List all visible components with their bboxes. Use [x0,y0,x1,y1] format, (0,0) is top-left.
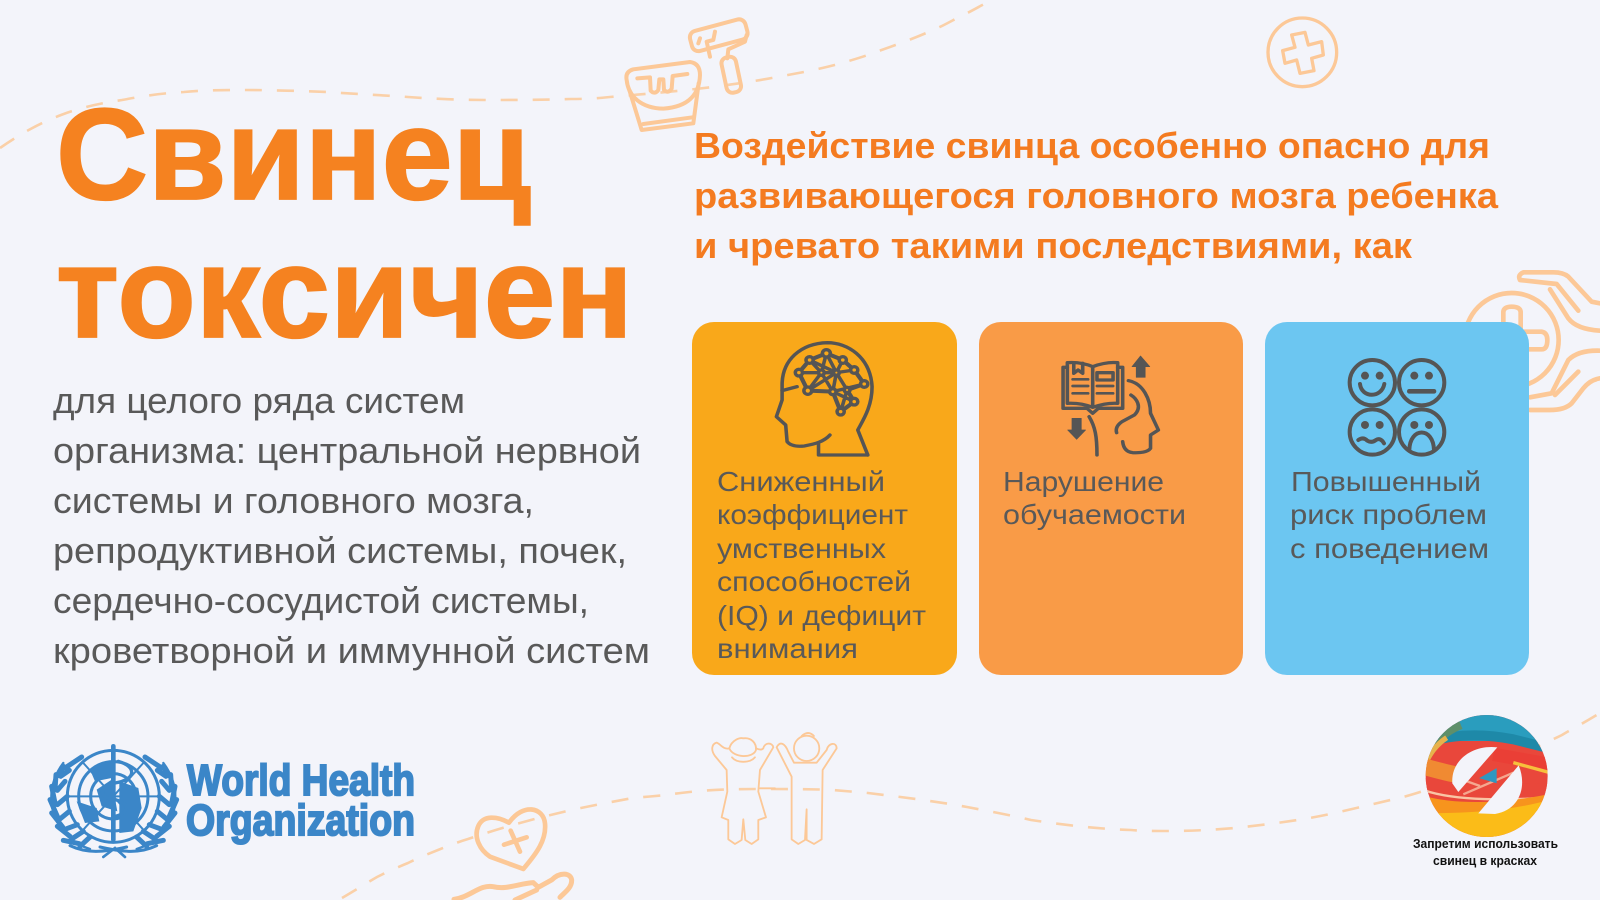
text block: affected body systems: системы и головного мозга, [53,480,534,521]
card text [1003,466,1186,530]
text block: affected body systems: сердечно-сосудистой системы, [53,580,589,621]
logo: paint ring [1426,715,1548,837]
heading: danger to the developing brain [694,125,1499,266]
card text: внимания [717,633,858,664]
card text: способностей [717,566,911,597]
icon: hands holding medical cross [1465,272,1600,410]
title: токсичен [56,219,633,365]
icon: open hand under heart [454,874,572,900]
text block: affected body systems: кроветворной и иммунной систем [53,630,650,671]
card text: умственных [717,533,886,564]
card text: риск проблем [1290,499,1487,530]
panel: behavioural problems [1265,322,1529,675]
card text: Нарушение [1003,466,1164,497]
caption: let's ban lead in paint: свинец в красках [1433,854,1537,868]
icon: book, head and arrows [1063,356,1158,455]
text block: affected body systems: для целого ряда систем [53,380,465,421]
panel: learning impairment [979,322,1243,675]
card text: с поведением [1290,533,1489,564]
wordmark: World Health [187,756,415,805]
caption: let's ban lead in paint: Запретим использовать [1413,837,1558,851]
card text: обучаемости [1003,499,1186,530]
icon: medical cross in circle [1268,18,1337,87]
logo: World Health Organization [50,746,415,857]
card text [717,466,926,664]
card text: Повышенный [1291,466,1481,497]
heading: danger to the developing brain: и чревато такими последствиями, как [694,225,1413,266]
panel: reduced IQ [692,322,957,675]
icon: two children with raised arms [712,733,837,844]
heading: danger to the developing brain: Воздействие свинца особенно опасно для [694,125,1490,166]
heading: danger to the developing brain: развивающегося головного мозга ребенка [694,175,1499,216]
card text [1290,466,1489,564]
title: Свинец [56,81,531,227]
card text: Сниженный [717,466,885,497]
card text: коэффициент [717,499,908,530]
text block: affected body systems: репродуктивной системы, почек, [53,530,627,571]
caption: let's ban lead in paint [1413,837,1558,868]
title [56,81,633,365]
icon: paint bucket and roller [626,18,749,130]
icon: head with brain network [776,343,872,455]
wordmark: Organization [186,796,415,845]
icon: heart with cross [477,809,545,869]
icon: WHO emblem [50,746,177,857]
text block: affected body systems [53,380,650,671]
wordmark [186,756,415,845]
icon: four emotion faces [1350,360,1444,455]
card text: (IQ) и дефицит [717,600,926,631]
text block: affected body systems: организма: центральной нервной [53,430,641,471]
